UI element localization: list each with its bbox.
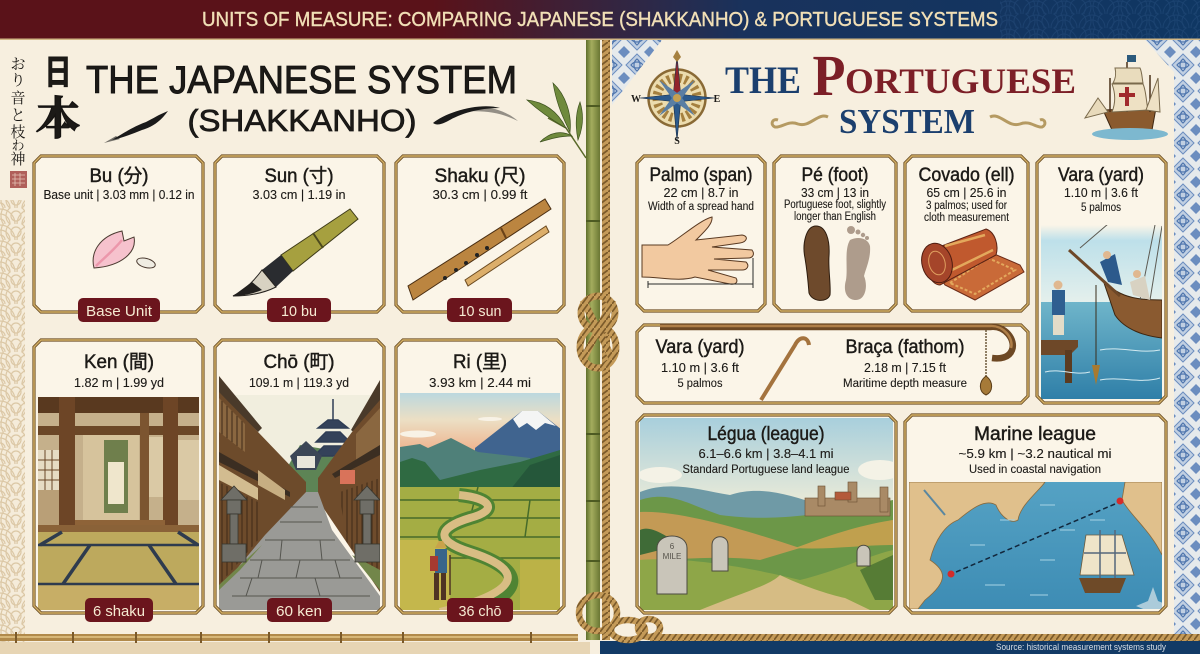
rope knot upper — [580, 296, 616, 368]
card: Vara and Braca: 5 palmos — [678, 378, 723, 390]
badge: 6 shaku: 6 shaku — [93, 603, 145, 620]
card: Cho: 109.1 m | 119.3 yd — [249, 375, 349, 390]
decorative sparkle — [1136, 587, 1162, 609]
icon: calligraphy brush — [233, 209, 358, 296]
card: Palmo: Palmo (span) — [650, 165, 752, 186]
card: Shaku: Shaku (尺) — [434, 166, 526, 187]
card: Sun: 3.03 cm | 1.19 in — [252, 187, 346, 202]
card: Vara tall: Vara (yard) — [1058, 165, 1144, 186]
card: Covado: Covado (ell) — [918, 165, 1014, 186]
heading: The Portuguese System: SYSTEM — [839, 102, 975, 141]
badge: 6 shaku — [85, 598, 153, 622]
card: Bu — [34, 156, 203, 322]
card: Ken: 1.82 m | 1.99 yd — [74, 375, 164, 390]
illustration: Portuguese countryside: MILE — [663, 552, 681, 561]
bamboo rail bottom — [0, 632, 578, 643]
icon: hilltop castle — [805, 482, 890, 516]
card: Covado: cloth measurement — [924, 212, 1010, 224]
icon: walking cane — [761, 338, 809, 400]
icon: stone lanterns — [221, 486, 380, 562]
calligraphy column and seal: り — [10, 69, 26, 90]
card: Covado: 65 cm | 25.6 in — [926, 185, 1006, 200]
card: Vara and Braca: Braça (fathom) — [846, 337, 964, 358]
card: Vara and Braca: Maritime depth measure — [843, 378, 967, 390]
icon: hiker — [430, 541, 450, 600]
illustration: Edo street — [219, 376, 380, 610]
bamboo stalk centre — [586, 40, 600, 640]
calligraphy column and seal: 神 — [10, 148, 26, 169]
icon: open hand with span arrow — [642, 217, 753, 288]
calligraphy column and seal: と — [10, 104, 26, 125]
heading: Japanese kanji: 本 — [35, 82, 81, 147]
card: Ri: 3.93 km | 2.44 mi — [429, 375, 531, 390]
card: Palmo: 22 cm | 8.7 in — [664, 185, 738, 200]
card: Pe: longer than English — [794, 211, 876, 223]
heading: The Portuguese System — [725, 43, 1076, 141]
card: Legua — [637, 415, 902, 613]
heading: The Japanese System: THE JAPANESE SYSTEM — [86, 59, 517, 102]
card: Ri — [396, 340, 564, 622]
card: Marine league: ~5.9 km | ~3.2 nautical mi — [958, 446, 1112, 461]
heading: The Portuguese System: THE — [725, 59, 801, 102]
calligraphy column and seal: 音 — [10, 87, 26, 108]
icon: shoe sole and footprint — [804, 226, 870, 300]
card: Legua: Légua (league) — [708, 424, 824, 445]
icon: sailing ship — [1079, 530, 1134, 593]
rope knot lower — [579, 595, 660, 640]
card: Sun: Sun (寸) — [264, 165, 334, 187]
heading: The Portuguese System: P — [812, 43, 846, 108]
card: Vara tall — [1037, 156, 1166, 403]
card: Covado — [905, 156, 1028, 311]
badge: 10 sun — [447, 298, 512, 322]
card: Covado: 3 palmos; used for — [926, 200, 1007, 212]
heading: The Japanese System: (SHAKKANHO) — [188, 103, 416, 138]
icon: compass rose — [631, 50, 721, 147]
card: Bu: Base unit | 3.03 mm | 0.12 in — [44, 187, 194, 202]
heading: Japanese kanji: 日 — [44, 45, 72, 94]
icon: milestones — [657, 536, 870, 594]
illustration: Portuguese countryside: 6 — [670, 542, 675, 551]
card: Shaku — [396, 156, 564, 322]
card: Pe: 33 cm | 13 in — [801, 185, 869, 200]
illustration: coastal sea map — [909, 482, 1162, 609]
header banner — [0, 0, 1200, 40]
illustration: Mount Fuji and rice fields — [400, 393, 562, 612]
badge: 10 bu — [267, 298, 331, 322]
card: Marine league — [905, 415, 1170, 625]
badge: 36 cho — [447, 598, 513, 622]
badge: 36 cho: 36 chō — [458, 603, 502, 620]
icon: compass rose: S — [674, 136, 680, 147]
icon: compass rose: W — [631, 94, 641, 105]
rope rail bottom — [650, 634, 1200, 641]
card: Legua: 6.1–6.6 km | 3.8–4.1 mi — [698, 446, 834, 461]
calligraphy column and seal: わ — [11, 135, 25, 154]
card: Palmo — [637, 156, 765, 311]
icon: plumb weight — [980, 330, 992, 395]
icon: caravel ship — [1085, 55, 1168, 140]
icon: measuring rod with hook — [660, 326, 1013, 358]
icon: shakuhachi flute and ruler — [408, 199, 551, 300]
source note: Source: historical measurement systems study — [996, 642, 1166, 653]
badge: 10 sun: 10 sun — [458, 303, 502, 320]
calligraphy column and seal: お — [10, 53, 26, 74]
card: Ken: Ken (間) — [84, 352, 154, 373]
icon: compass rose: E — [714, 94, 721, 105]
card: Palmo: Width of a spread hand — [648, 201, 754, 213]
rope vertical — [602, 40, 610, 640]
card: Legua: Standard Portuguese land league — [682, 464, 850, 476]
badge: 60 ken — [267, 598, 332, 622]
calligraphy column and seal: 枝 — [10, 121, 26, 142]
card: Vara tall: 1.10 m | 3.6 ft — [1064, 185, 1138, 200]
card: Cho — [215, 340, 384, 622]
calligraphy column and seal — [10, 53, 27, 188]
icon: sakura petal and grain — [93, 231, 156, 270]
card: Vara and Braca — [637, 325, 1028, 403]
heading: The Japanese System — [86, 59, 517, 138]
card: Marine league: Marine league — [974, 424, 1096, 445]
card: Pe: Portuguese foot, slightly — [784, 199, 886, 211]
decorative rope swirls — [772, 116, 1045, 127]
card: Bu: Bu (分) — [90, 165, 148, 187]
card: Vara and Braca: 1.10 m | 3.6 ft — [661, 360, 739, 375]
illustration: tatami room — [38, 397, 199, 610]
card: Vara and Braca: 2.18 m | 7.15 ft — [864, 360, 946, 375]
card: Shaku: 30.3 cm | 0.99 ft — [432, 187, 528, 202]
card: Cho: Chō (町) — [264, 352, 334, 373]
illustration: sailors sounding from ship and dock — [1040, 224, 1162, 399]
heading: The Portuguese System: ORTUGUESE — [845, 61, 1076, 101]
badge: 60 ken: 60 ken — [276, 603, 322, 620]
card: Pe — [774, 156, 896, 311]
badge: base unit — [78, 298, 160, 322]
card: Ri: Ri (里) — [453, 352, 507, 373]
card: Pe: Pé (foot) — [802, 165, 868, 186]
badge: base unit: Base Unit — [86, 303, 153, 320]
card: Ken — [34, 340, 203, 622]
icon: bamboo leaves — [527, 83, 586, 158]
icon: rolled carpet — [917, 229, 1024, 300]
ink brush strokes — [104, 106, 518, 143]
illustration: Portuguese countryside — [638, 418, 902, 612]
badge: 10 bu: 10 bu — [281, 303, 317, 320]
card: Marine league: Used in coastal navigation — [969, 464, 1101, 476]
card: Vara and Braca: Vara (yard) — [656, 337, 744, 358]
heading: Japanese kanji — [35, 45, 81, 147]
card: Sun — [215, 156, 384, 322]
card: Vara tall: 5 palmos — [1081, 202, 1121, 214]
header banner: UNITS OF MEASURE: COMPARING JAPANESE (SHAKKANHO) & PORTUGUESE SYSTEMS — [202, 9, 998, 31]
